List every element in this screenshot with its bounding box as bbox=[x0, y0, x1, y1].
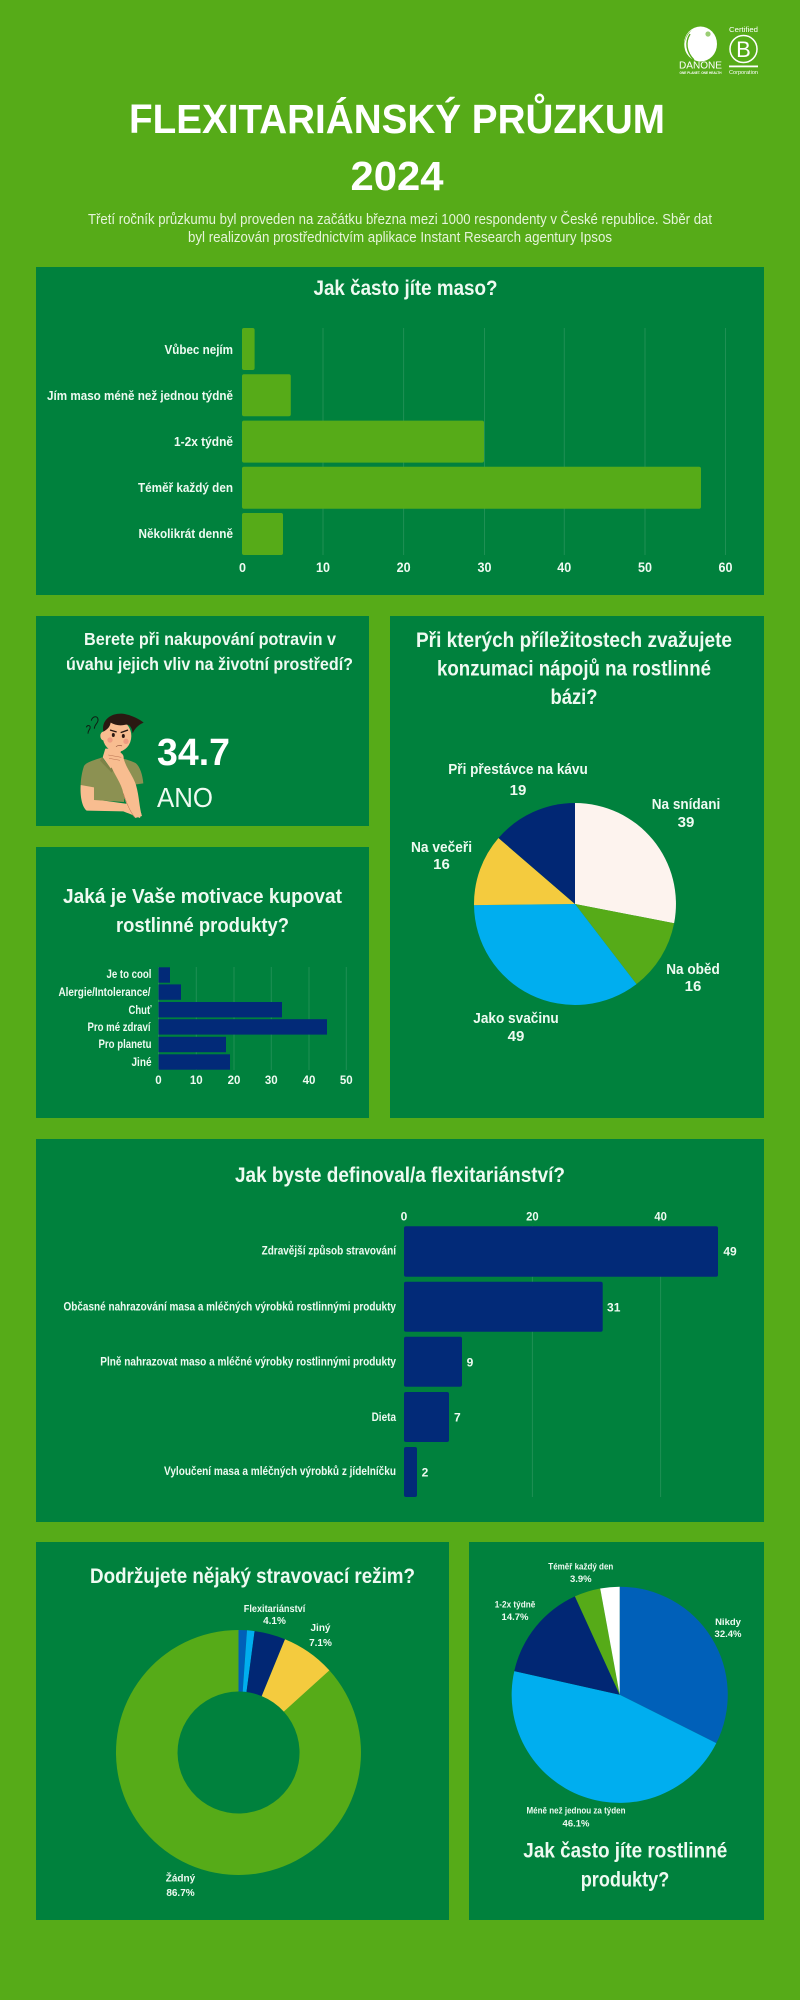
bar chart: definitions: Vyloučení masa a mléčných výrobků z jídelníčku bbox=[164, 1466, 396, 1478]
label: breakfast bbox=[652, 796, 720, 831]
bar chart: definitions: 31 bbox=[607, 1300, 621, 1314]
heading: konzumaci nápojů na rostlinné bbox=[437, 656, 711, 680]
panel: Jak často jíte maso bbox=[36, 267, 764, 595]
label: less than weekly bbox=[526, 1806, 626, 1830]
heading bbox=[63, 885, 342, 937]
bar chart: definitions: 7 bbox=[454, 1410, 461, 1424]
label: coffee break: 19 bbox=[510, 782, 526, 799]
label: 1-2x weekly bbox=[495, 1600, 535, 1623]
Danone wordmark: DANONE bbox=[679, 60, 722, 72]
bar chart: meat frequency: 0 bbox=[239, 560, 246, 575]
title: 2024 bbox=[350, 153, 444, 199]
label: none bbox=[166, 1872, 196, 1899]
panel: motivation bbox=[36, 847, 369, 1118]
label: dinner bbox=[411, 839, 472, 873]
bar chart: motivation: 0 bbox=[155, 1075, 162, 1087]
bar chart: definitions: Plně nahrazovat maso a mléčné výrobky rostlinnými produkty bbox=[100, 1356, 397, 1368]
title bbox=[129, 93, 665, 199]
intro text bbox=[88, 211, 712, 246]
bar chart: meat frequency: 40 bbox=[557, 560, 571, 575]
label: coffee break: Při přestávce na kávu bbox=[448, 761, 588, 778]
label: none: Žádný bbox=[166, 1872, 196, 1884]
bar chart: definitions: 9 bbox=[467, 1356, 474, 1370]
heading: Dodržujete nějaký stravovací režim? bbox=[90, 1564, 415, 1588]
label: none: 86.7% bbox=[166, 1888, 195, 1899]
bar chart: meat frequency: 1-2x týdně bbox=[174, 434, 233, 449]
label: lunch: 16 bbox=[685, 978, 701, 995]
label: dinner: 16 bbox=[433, 856, 450, 873]
label: breakfast: Na snídani bbox=[652, 796, 720, 813]
bar chart: motivation: 30 bbox=[265, 1075, 278, 1087]
stat value: 34.7 bbox=[157, 732, 230, 774]
title: FLEXITARIÁNSKÝ PRŮZKUM bbox=[129, 93, 665, 142]
bar chart: motivation: Jiné bbox=[132, 1057, 152, 1069]
bar chart: meat frequency: 50 bbox=[638, 560, 652, 575]
icon: thinking man bbox=[81, 714, 144, 818]
label: 1-2x weekly: 1-2x týdně bbox=[495, 1600, 535, 1610]
heading bbox=[416, 628, 732, 709]
bar chart: definitions: Dieta bbox=[372, 1412, 397, 1424]
bar chart: meat frequency: Jím maso méně než jednou týdně bbox=[47, 388, 233, 403]
Danone tagline: ONE PLANET. ONE HEALTH bbox=[680, 71, 722, 75]
Corporation label: Corporation bbox=[729, 70, 758, 76]
panel: dietary regime bbox=[36, 1542, 449, 1920]
heading: rostlinné produkty? bbox=[116, 914, 289, 937]
stat label: ANO bbox=[157, 782, 213, 813]
label: flexitarianism: 4.1% bbox=[263, 1616, 286, 1627]
logos: Danone and Certified B Corporation bbox=[679, 25, 758, 76]
heading: Jak často jíte rostlinné bbox=[523, 1838, 727, 1862]
heading: Jak často jíte maso? bbox=[314, 277, 498, 300]
label: snack: 49 bbox=[508, 1028, 524, 1045]
bar chart: meat frequency: 30 bbox=[478, 560, 492, 575]
label: less than weekly: Méně než jednou za týden bbox=[526, 1806, 626, 1816]
bar chart: meat frequency: Vůbec nejím bbox=[164, 342, 233, 357]
intro text: byl realizován prostřednictvím aplikace Instant Research agentury Ipsos bbox=[188, 230, 612, 246]
panel: environmental impact bbox=[36, 616, 369, 826]
intro text: Třetí ročník průzkumu byl proveden na začátku března mezi 1000 respondenty v České republice. Sběr dat bbox=[88, 211, 712, 228]
bar chart: meat frequency: 20 bbox=[397, 560, 411, 575]
label: other bbox=[309, 1623, 332, 1649]
label: snack: Jako svačinu bbox=[473, 1010, 559, 1027]
pie chart: plant products bbox=[512, 1587, 728, 1803]
heading: Jak byste definoval/a flexitariánství? bbox=[235, 1163, 565, 1187]
label: almost every day: 3.9% bbox=[570, 1574, 592, 1585]
label: 1-2x weekly: 14.7% bbox=[502, 1612, 529, 1623]
bar chart: meat frequency: 60 bbox=[718, 560, 732, 575]
bar chart: meat frequency bbox=[47, 328, 732, 575]
heading bbox=[523, 1838, 727, 1892]
label: less than weekly: 46.1% bbox=[563, 1818, 590, 1830]
Certified label: Certified bbox=[729, 25, 758, 34]
bar chart: definitions: Zdravější způsob stravování bbox=[262, 1246, 397, 1258]
label: almost every day bbox=[548, 1562, 613, 1585]
label: never bbox=[715, 1617, 742, 1640]
bar chart: motivation: 40 bbox=[303, 1075, 315, 1087]
bar chart: definitions: 20 bbox=[526, 1210, 539, 1224]
pie chart: drink occasions bbox=[474, 803, 676, 1005]
donut chart: dietary regime bbox=[116, 1630, 361, 1875]
heading: Při kterých příležitostech zvažujete bbox=[416, 628, 732, 652]
label: other: 7.1% bbox=[309, 1638, 332, 1649]
bar chart: motivation bbox=[58, 967, 353, 1087]
heading: Berete při nakupování potravin v bbox=[84, 629, 336, 649]
bar chart: motivation: Chuť bbox=[128, 1005, 152, 1017]
bar chart: definitions: 2 bbox=[422, 1466, 429, 1480]
bar chart: meat frequency: Téměř každý den bbox=[138, 480, 233, 495]
bar chart: definitions: 40 bbox=[654, 1210, 667, 1224]
bar chart: meat frequency: 10 bbox=[316, 560, 330, 575]
bar chart: motivation: Pro mé zdraví bbox=[88, 1022, 151, 1034]
label: lunch bbox=[666, 961, 720, 995]
label: other: Jiný bbox=[310, 1623, 331, 1634]
heading: úvahu jejich vliv na životní prostředí? bbox=[66, 654, 353, 674]
label: breakfast: 39 bbox=[678, 814, 694, 831]
label: lunch: Na oběd bbox=[666, 961, 720, 978]
bar chart: motivation: 20 bbox=[228, 1075, 240, 1087]
bar chart: definitions bbox=[64, 1210, 737, 1497]
bar chart: definitions: 0 bbox=[401, 1210, 408, 1224]
label: coffee break bbox=[448, 761, 588, 799]
heading: Jaká je Vaše motivace kupovat bbox=[63, 885, 342, 908]
heading: bázi? bbox=[550, 685, 598, 709]
bar chart: motivation: 50 bbox=[340, 1075, 353, 1087]
label: never: Nikdy bbox=[715, 1617, 742, 1628]
bar chart: meat frequency: Několikrát denně bbox=[138, 526, 233, 541]
label: never: 32.4% bbox=[715, 1629, 742, 1640]
panel: plant product frequency bbox=[469, 1542, 764, 1920]
bar chart: motivation: Alergie/Intolerance/ bbox=[58, 987, 151, 999]
bar chart: motivation: 10 bbox=[190, 1075, 203, 1087]
bar chart: motivation: Pro planetu bbox=[98, 1039, 152, 1051]
bar chart: definitions: 49 bbox=[723, 1244, 737, 1258]
panel: defining flexitarianism bbox=[36, 1139, 764, 1522]
label: flexitarianism: Flexitariánství bbox=[244, 1604, 306, 1615]
icon: B Corp mark: B bbox=[736, 37, 751, 62]
label: flexitarianism bbox=[244, 1604, 306, 1627]
bar chart: definitions: Občasné nahrazování masa a mléčných výrobků rostlinnými produkty bbox=[64, 1302, 397, 1314]
panel: plant-based drinks bbox=[390, 616, 764, 1118]
heading bbox=[66, 629, 353, 674]
label: almost every day: Téměř každý den bbox=[548, 1562, 613, 1572]
label: dinner: Na večeři bbox=[411, 839, 472, 856]
label: snack bbox=[473, 1010, 559, 1045]
icon: Danone globe bbox=[684, 26, 717, 62]
heading: produkty? bbox=[581, 1868, 669, 1892]
bar chart: motivation: Je to cool bbox=[106, 969, 152, 981]
